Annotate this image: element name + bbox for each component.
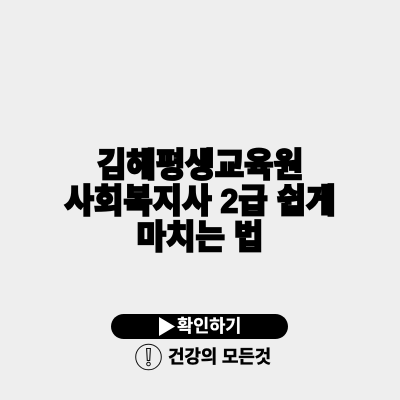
title line 3: 마치는 법	[137, 218, 263, 256]
icon: exclamation circle	[135, 344, 162, 370]
button label: 확인하기	[177, 316, 241, 336]
button: confirm	[111, 314, 288, 339]
title	[64, 146, 336, 256]
title line 2: 사회복지사 2급 쉽게	[64, 182, 336, 220]
title line 1: 김해평생교육원	[97, 146, 303, 184]
icon: play triangle	[159, 317, 175, 336]
site name: 건강의 모든것	[168, 347, 271, 367]
